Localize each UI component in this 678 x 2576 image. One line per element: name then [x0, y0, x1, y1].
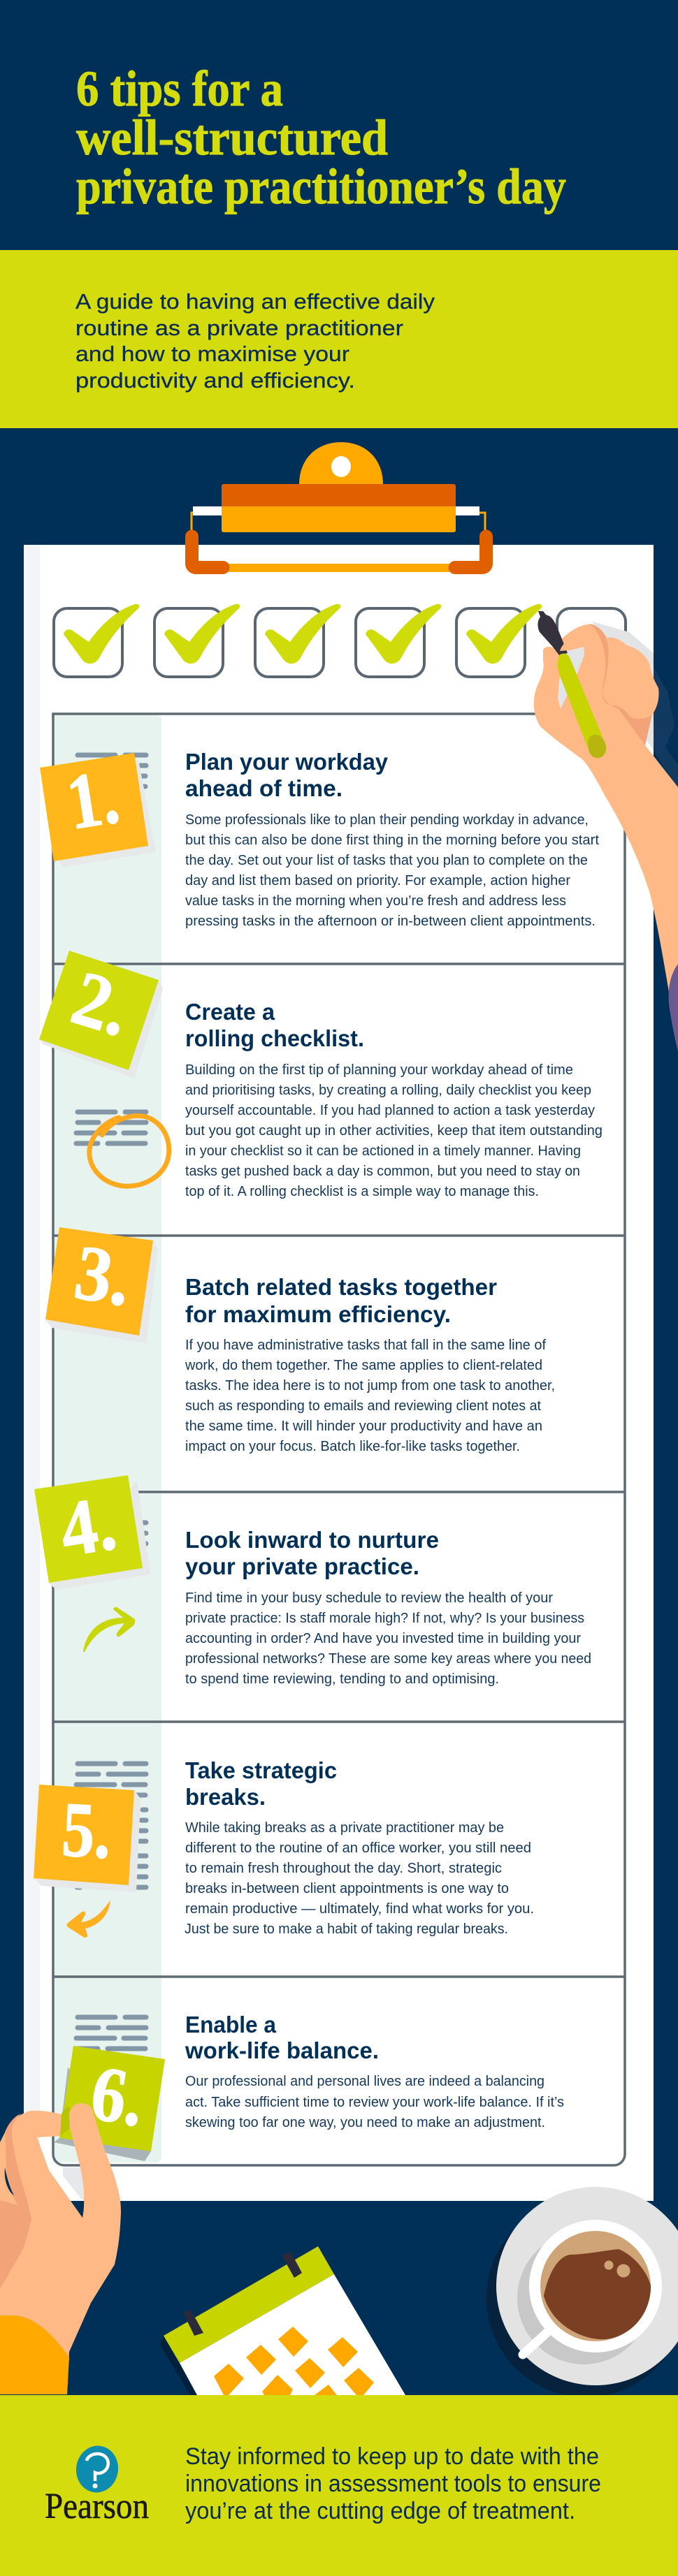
text: tip 5 body: Just be sure to make a habit of taking regular breaks. — [185, 1922, 508, 1937]
heading: tip 3: for maximum efficiency. — [185, 1301, 451, 1327]
text: tip 6 body: act. Take sufficient time to review your work-life balance. If it’s — [185, 2095, 564, 2110]
number note 5: 5. — [60, 1786, 113, 1875]
intro band — [0, 250, 678, 428]
paper sheet — [24, 545, 654, 2201]
icon: purple sleeve — [668, 964, 678, 1051]
text: tip 2 body: but you got caught up in other activities, keep that item outstanding — [185, 1123, 603, 1139]
panel: tip 2 — [39, 951, 603, 1199]
callout text: you’re at the cutting edge of treatment. — [185, 2498, 575, 2524]
callout text — [185, 2443, 601, 2524]
margin text lines — [76, 755, 146, 2049]
heading: tip 3 — [185, 1274, 497, 1327]
logo: Pearson: Pearson — [45, 2487, 149, 2526]
text: tip 2 body: and prioritising tasks, by creating a rolling, daily checklist you keep — [185, 1083, 591, 1098]
title — [76, 61, 566, 214]
checklist frame — [53, 714, 625, 2165]
text: tip 4 body: professional networks? These are some key areas where you need — [185, 1651, 591, 1667]
text: tip 2 body: in your checklist so it can be actioned in a timely manner. Having — [185, 1143, 581, 1159]
arrow: lime curved — [83, 1607, 135, 1652]
intro band: routine as a private practitioner — [75, 316, 403, 340]
number note 5 — [34, 1785, 140, 1892]
heading: tip 1: Plan your workday — [185, 749, 389, 775]
text: tip 2 body: top of it. A rolling checklist is a simple way to manage this. — [185, 1184, 539, 1199]
text: tip 5 body: different to the routine of an office worker, you still need — [185, 1840, 531, 1856]
number note 2: 2. — [63, 954, 140, 1053]
heading: tip 5: Take strategic — [185, 1757, 337, 1783]
text: tip 2 body: tasks get pushed back a day is common, but you need to stay on — [185, 1164, 580, 1179]
panel: tip 4 — [34, 1475, 591, 1687]
intro band: productivity and efficiency. — [75, 368, 355, 393]
text: tip 5 body: breaks in-between client appointments is one way to — [185, 1881, 509, 1896]
heading: tip 5 — [185, 1757, 337, 1810]
icon: coffee cup on saucer — [486, 2187, 678, 2397]
footer band — [0, 2395, 678, 2576]
number note 1: 1. — [62, 753, 124, 847]
text: tip 2 body: yourself accountable. If you had planned to action a task yesterday — [185, 1103, 595, 1118]
panel: tip 5 — [34, 1757, 534, 1938]
text: tip 1 body: pressing tasks in the afternoon or in-between client appointments. — [185, 914, 596, 929]
heading: tip 4: your private practice. — [185, 1553, 419, 1579]
panel: tip 6 — [54, 2012, 564, 2161]
number note 4 — [34, 1475, 150, 1590]
heading: tip 1: ahead of time. — [185, 775, 342, 801]
text: tip 6 body: skewing too far one way, you need to make an adjustment. — [185, 2115, 545, 2130]
heading: tip 2 — [185, 999, 364, 1051]
number note 6: 6. — [85, 2049, 150, 2143]
icon: calendar — [160, 2246, 405, 2395]
text: tip 4 body: accounting in order? And have you invested time in building your — [185, 1631, 581, 1646]
number note 4: 4. — [55, 1479, 122, 1574]
arrow: orange curved — [67, 1900, 110, 1938]
intro band: A guide to having an effective daily — [75, 289, 435, 314]
logo: Pearson — [45, 2443, 149, 2526]
heading: tip 4 — [185, 1527, 439, 1579]
text: tip 4 body — [185, 1590, 591, 1687]
heading: tip 3: Batch related tasks together — [185, 1274, 497, 1300]
panel: tip 1 — [40, 749, 599, 929]
heading: tip 1 — [185, 749, 389, 801]
text: tip 3 body: the same time. It will hinder your productivity and have an — [185, 1419, 542, 1434]
text: tip 1 body: value tasks in the morning when you’re fresh and address less — [185, 893, 566, 909]
panel: tip 3 — [45, 1227, 555, 1454]
number note 2 — [39, 951, 163, 1078]
heading: tip 4: Look inward to nurture — [185, 1527, 439, 1553]
tick marks — [64, 604, 542, 664]
text: tip 5 body — [185, 1820, 534, 1937]
heading: tip 6: work-life balance. — [185, 2037, 379, 2063]
text: tip 6 body — [185, 2074, 564, 2130]
text: tip 5 body: remain productive — ultimately, find what works for you. — [185, 1901, 534, 1917]
text: tip 1 body: but this can also be done first thing in the morning before you start — [185, 833, 599, 848]
text: tip 2 body — [185, 1062, 603, 1199]
callout text: innovations in assessment tools to ensure — [185, 2471, 601, 2497]
text: tip 3 body: impact on your focus. Batch like-for-like tasks together. — [185, 1439, 520, 1454]
text: tip 5 body: to remain fresh throughout the day. Short, strategic — [185, 1861, 502, 1876]
text: tip 4 body: Find time in your busy schedule to review the health of your — [185, 1590, 553, 1606]
callout text: Stay informed to keep up to date with the — [185, 2443, 599, 2470]
title: well-structured — [76, 110, 388, 166]
checklist side strip — [55, 715, 161, 2162]
text: tip 3 body: work, do them together. The same applies to client-related — [185, 1358, 542, 1373]
text: tip 5 body: While taking breaks as a private practitioner may be — [185, 1820, 504, 1836]
checkboxes row — [54, 608, 626, 677]
text: tip 3 body: tasks. The idea here is to not jump from one task to another, — [185, 1378, 555, 1393]
number note 3: 3. — [69, 1229, 137, 1323]
text: tip 3 body — [185, 1338, 555, 1454]
text: tip 3 body: If you have administrative tasks that fall in the same line of — [185, 1338, 546, 1353]
text: tip 4 body: to spend time reviewing, tending to and optimising. — [185, 1671, 499, 1687]
number note 6 — [54, 2046, 165, 2161]
heading: tip 5: breaks. — [185, 1784, 266, 1810]
text: tip 4 body: private practice: Is staff morale high? If not, why? Is your business — [185, 1611, 584, 1626]
icon: left hand holding note — [0, 2103, 121, 2394]
heading: tip 2: rolling checklist. — [185, 1025, 364, 1051]
heading: tip 6 — [185, 2012, 379, 2063]
heading: tip 6: Enable a — [185, 2012, 277, 2037]
text: tip 6 body: Our professional and personal lives are indeed a balancing — [185, 2074, 544, 2089]
text: tip 2 body: Building on the first tip of planning your workday ahead of time — [185, 1062, 573, 1078]
icon: clipboard clip — [185, 442, 493, 574]
icon: hand-drawn circle — [89, 1116, 169, 1186]
text: tip 1 body: day and list them based on priority. For example, action higher — [185, 873, 570, 888]
number note 1 — [40, 753, 156, 867]
text: tip 1 body: Some professionals like to plan their pending workday in advance, — [185, 812, 589, 828]
intro band: and how to maximise your — [75, 342, 349, 366]
heading: tip 2: Create a — [185, 999, 275, 1025]
icon: right hand with pen — [534, 611, 678, 1048]
number note 3 — [45, 1227, 158, 1343]
title: private practitioner’s day — [76, 159, 566, 214]
title: 6 tips for a — [76, 61, 283, 117]
text: tip 1 body — [185, 812, 599, 929]
text: tip 3 body: such as responding to emails and reviewing client notes at — [185, 1398, 541, 1414]
text: tip 1 body: the day. Set out your list of tasks that you plan to complete on the — [185, 853, 588, 868]
